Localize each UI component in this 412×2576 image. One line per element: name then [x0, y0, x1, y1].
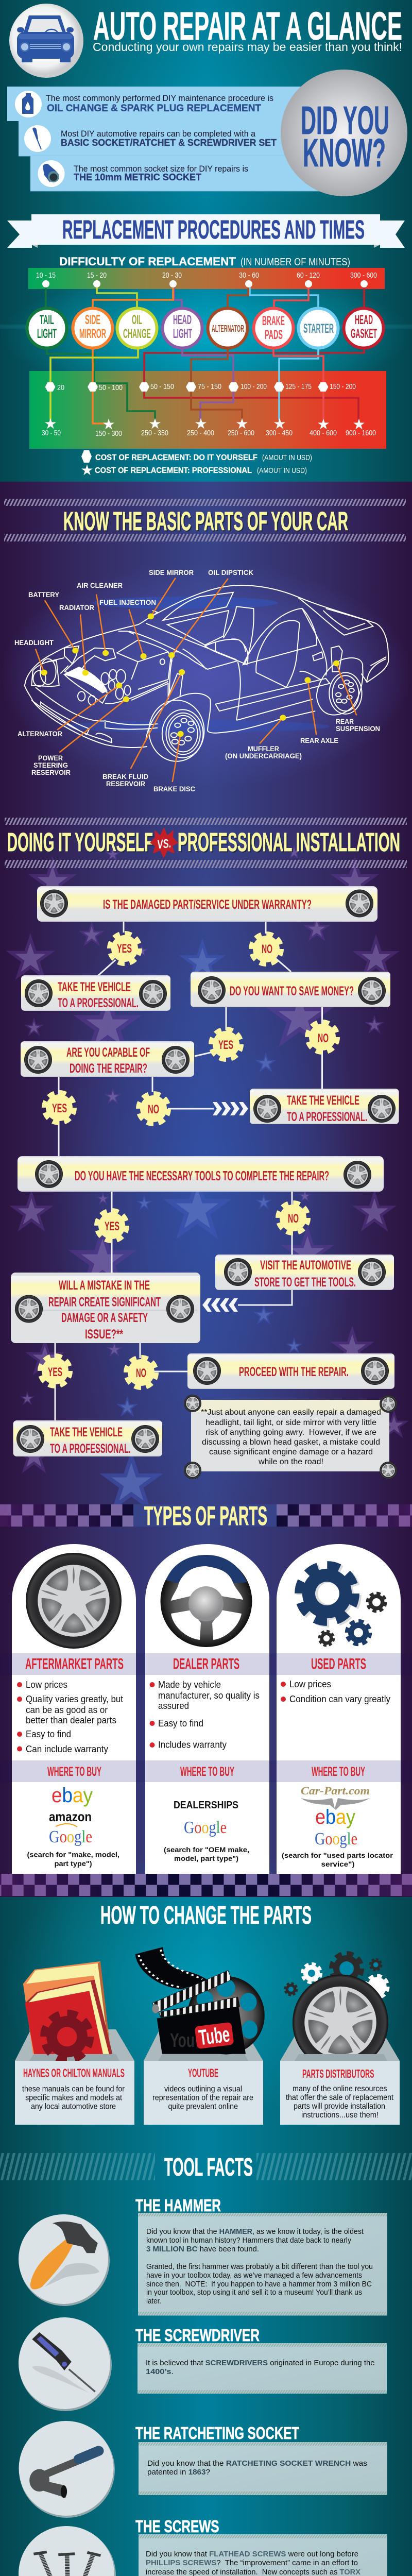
legend: COST OF REPLACEMENT: PROFESSIONAL: [95, 466, 252, 475]
part labels: SUSPENSION: [336, 725, 380, 733]
fact panel 2: socket and screwdriver set: Most DIY automotive repairs can be completed with a: [61, 129, 256, 139]
column: used parts: USED PARTS: [311, 1656, 366, 1672]
minutes scale bar: 20 - 30: [162, 271, 182, 280]
result: take the vehicle to a professional: TAKE THE VEHICLE: [58, 980, 131, 994]
search hint: part type"): [55, 1859, 92, 1868]
answer gear: yes: [110, 934, 140, 963]
search hint: (search for "used parts locator: [282, 1851, 393, 1859]
fact panel: [139, 2534, 387, 2576]
logo: car-part.com: [301, 1784, 370, 1810]
part: brake pads: [253, 308, 294, 348]
search hint: [164, 1845, 249, 1862]
professional costs: 900 - 1600: [346, 429, 376, 437]
answer gear: yes: YES: [117, 942, 132, 956]
question: save money: [191, 972, 390, 1007]
professional costs: 400 - 600: [310, 429, 337, 437]
did you know panels: [7, 87, 324, 191]
subtitle: Conducting your own repairs may be easier than you think!: [93, 40, 402, 54]
gap shading for bands: [0, 1653, 412, 1782]
answer gear: yes: [40, 1356, 70, 1386]
benefits list: Easy to find: [158, 1718, 203, 1728]
resource box: youtube: YOUTUBE: [188, 2066, 218, 2079]
resource box: parts distributors: parts will provide installation: [294, 2102, 385, 2111]
search hint: service"): [321, 1860, 354, 1868]
fact panel 3: 10mm socket: The most common socket size for DIY repairs is: [74, 164, 248, 174]
benefits list: manufacturer, so quality is: [158, 1690, 260, 1701]
answer gear: no: [139, 1094, 168, 1124]
part: oil change: CHANGE: [123, 327, 151, 341]
tool: hammer: THE HAMMER: [135, 2196, 221, 2215]
fact panel: have in your toolbox today, as we’ve managed a few advancements: [146, 2272, 362, 2280]
professional costs: 30 - 50: [42, 429, 61, 437]
heading: tool facts: TOOL FACTS: [164, 2154, 253, 2181]
benefits list: Low prices: [289, 1679, 331, 1689]
part labels: RADIATOR: [59, 604, 94, 612]
part labels: (ON UNDERCARRIAGE): [225, 752, 302, 760]
do it yourself costs: 75 - 150: [198, 382, 221, 391]
footnote card: [184, 1395, 397, 1479]
question: mistake consequences: DAMAGE OR A SAFETY: [61, 1311, 148, 1325]
fact panel: Did you know that the HAMMER, as we know it today, is the oldest: [146, 2228, 364, 2236]
icon: hammer: [19, 2214, 110, 2306]
result: take the vehicle to a professional: [21, 975, 170, 1011]
fact panel: [139, 2442, 387, 2495]
legend: (AMOUT IN USD): [257, 466, 307, 475]
part: side mirror: MIRROR: [79, 327, 106, 341]
car diagram glow: [0, 562, 412, 788]
tool: hammer: [19, 2196, 387, 2315]
search hint: (search for "OEM make,: [164, 1845, 249, 1854]
benefits list: [149, 1680, 260, 1750]
part: head gasket: HEAD: [355, 313, 373, 327]
search hint: [282, 1851, 393, 1868]
part: starter: STARTER: [303, 321, 334, 336]
part labels: ALTERNATOR: [18, 730, 62, 738]
checkered divider: [0, 1874, 412, 1897]
part: brake pads: BRAKE: [262, 314, 285, 328]
resource box: youtube: videos outlining a visual: [164, 2085, 242, 2094]
benefits list: Made by vehicle: [158, 1680, 221, 1690]
heading: doing it yourself vs professional installation: DOING IT YOURSELF: [7, 827, 153, 857]
fact panel 1: oil change: [7, 87, 316, 121]
part: head gasket: GASKET: [351, 327, 377, 341]
part labels: HEADLIGHT: [14, 639, 54, 647]
fact panel: [138, 2213, 387, 2315]
part labels: OIL DIPSTICK: [208, 569, 253, 577]
answer gear: no: [278, 1203, 308, 1233]
fact panel: Granted, the first hammer was probably a bit different than the tool you: [146, 2263, 373, 2271]
question: mistake consequences: REPAIR CREATE SIGNIFICANT: [48, 1295, 161, 1310]
icon: gears: [299, 1566, 385, 1646]
part labels: STEERING: [33, 761, 68, 769]
part: alternator: ALTERNATOR: [212, 324, 244, 334]
answer gear: yes: [97, 1211, 127, 1241]
search hint: model, part type"): [174, 1854, 238, 1862]
legend: (AMOUT IN USD): [262, 453, 312, 462]
part: oil change: [117, 308, 157, 348]
answer gear: no: NO: [136, 1366, 146, 1380]
result: visit the automotive store: VISIT THE AUTOMOTIVE: [260, 1258, 351, 1273]
fact panel 2: socket and screwdriver set: [19, 121, 317, 156]
do it yourself costs: 100 - 200: [241, 382, 267, 391]
professional costs: 250 - 350: [141, 429, 168, 437]
background: teal header section: [0, 0, 412, 482]
part labels: BREAK FLUID: [102, 773, 148, 781]
heading: tool facts: [0, 2153, 412, 2181]
fact panel 1: oil change: The most commonly performed DIY maintenance procedure is: [46, 94, 273, 103]
icon: film reel and clapperboard: [135, 1947, 265, 2055]
icon: film reel and clapperboard: You: [170, 2030, 195, 2052]
fact panel: 1400’s .: [146, 2368, 174, 2376]
column: aftermarket parts: [12, 1544, 136, 1874]
benefits list: Easy to find: [26, 1729, 71, 1739]
question: capable of repair: [21, 1041, 194, 1077]
answer gear: yes: [44, 1093, 74, 1123]
part labels: REAR AXLE: [300, 737, 338, 744]
footnote card: while on the road!: [258, 1458, 323, 1466]
minutes scale bar: [28, 268, 385, 289]
professional costs: 300 - 450: [266, 429, 293, 437]
resource box: manuals: HAYNES OR CHILTON MANUALS: [23, 2066, 125, 2079]
resource box: manuals: specific makes and models at: [25, 2094, 122, 2103]
column: dealer parts: [145, 1544, 269, 1874]
tool: screws: [19, 2517, 387, 2576]
icon: tire: [26, 1553, 122, 1649]
column: dealer parts: WHERE TO BUY: [180, 1765, 234, 1779]
benefits list: Low prices: [26, 1680, 67, 1690]
flowchart: [11, 886, 399, 1479]
resource box: manuals: [15, 1961, 134, 2125]
answer gear: yes: YES: [218, 1038, 233, 1052]
answer gear: no: NO: [262, 942, 272, 956]
resource box: parts distributors: instructions...use them!: [301, 2111, 379, 2120]
benefits list: can be as good as or: [26, 1705, 108, 1715]
tool: screwdriver: THE SCREWDRIVER: [135, 2326, 260, 2345]
part labels: MUFFLER: [248, 745, 279, 753]
part: oil change: OIL: [132, 313, 142, 327]
answer gear: yes: YES: [48, 1365, 62, 1379]
footnote card: risk of anything going awry. However, if we are: [205, 1428, 376, 1437]
question: capable of repair: DOING THE REPAIR?: [70, 1061, 147, 1076]
part: head light: HEAD: [173, 313, 192, 327]
legend: [81, 450, 312, 475]
logo: car-part.com: Car-Part.com: [301, 1784, 370, 1797]
resource box: parts distributors: [280, 1954, 400, 2125]
fact panel: PHILLIPS SCREWS ? The “improvement” came in an effort to: [146, 2559, 358, 2567]
part labels: RESERVOIR: [106, 780, 145, 788]
icon: film reel and clapperboard: Tube: [197, 2022, 231, 2049]
icon: screws: [19, 2526, 116, 2576]
question: necessary tools: [18, 1156, 384, 1192]
part labels: AIR CLEANER: [77, 582, 123, 589]
fact panel: patented in 1863?: [147, 2468, 210, 2477]
icon: steering wheel: [161, 1555, 252, 1647]
do it yourself costs: 150 - 200: [330, 382, 356, 391]
search hint: [27, 1851, 119, 1868]
result: take the vehicle to a professional: [250, 1089, 399, 1124]
did you know circle: [281, 70, 407, 196]
part: side mirror: SIDE: [85, 313, 100, 327]
icon: ratchet: [19, 2421, 115, 2518]
logo: google: Google: [184, 1818, 227, 1837]
tool: ratcheting socket: [19, 2421, 387, 2518]
answer gear: no: [307, 1022, 337, 1052]
resource box: manuals: any local automotive store: [31, 2103, 116, 2111]
fact panel: It is believed that SCREWDRIVERS originated in Europe during the: [146, 2359, 375, 2367]
question: mistake consequences: ISSUE?**: [85, 1327, 123, 1342]
fact panel 1: oil change: OIL CHANGE & SPARK PLUG REPLACEMENT: [47, 103, 261, 114]
question: under warranty: [37, 886, 377, 922]
chart heading: [59, 255, 350, 268]
footnote card: **Just about anyone can easily repair a damaged: [201, 1408, 381, 1417]
fact panel: since then. NOTE: If you happen to have a hammer from 3 million BC: [146, 2280, 372, 2289]
fact panel: later.: [146, 2297, 161, 2306]
resource box: parts distributors: that offer the sale of replacement: [286, 2093, 393, 2102]
part pointers: [36, 578, 356, 782]
part: brake pads: PADS: [265, 328, 283, 342]
do it yourself costs: 125 - 175: [285, 382, 312, 391]
benefits list: Includes warranty: [158, 1739, 227, 1750]
resource box: youtube: quite prevalent online: [168, 2103, 238, 2111]
part labels: [14, 569, 380, 793]
tool: screwdriver: [19, 2317, 387, 2411]
professional costs: 150 - 300: [95, 429, 122, 438]
fact panel: 3 MILLION BC have been found.: [146, 2245, 259, 2253]
column: aftermarket parts: AFTERMARKET PARTS: [25, 1656, 124, 1672]
benefits list: [281, 1679, 390, 1704]
part labels: RESERVOIR: [31, 769, 71, 776]
fact panel: Did you know that the RATCHETING SOCKET WRENCH was: [147, 2460, 367, 2468]
resource box: youtube: [135, 1947, 265, 2125]
resource box: manuals: these manuals can be found for: [22, 2085, 125, 2094]
icon: repair manuals: [23, 1961, 112, 2060]
connector lines: [46, 284, 364, 423]
arrow: back to mistake question: [202, 1298, 238, 1312]
benefits list: Condition can vary greatly: [289, 1694, 390, 1704]
benefits list: Can include warranty: [26, 1744, 108, 1754]
column: dealer parts: DEALERSHIPS: [174, 1800, 238, 1811]
question: capable of repair: ARE YOU CAPABLE OF: [66, 1045, 150, 1060]
column: aftermarket parts: WHERE TO BUY: [47, 1765, 101, 1779]
professional costs: 250 - 600: [228, 429, 254, 437]
part labels: BATTERY: [28, 591, 59, 599]
result: take the vehicle to a professional: TAKE THE VEHICLE: [50, 1425, 123, 1439]
resource box: parts distributors: many of the online resources: [293, 2084, 387, 2093]
part: tail light: [27, 308, 67, 348]
result: proceed with the repair: [187, 1353, 394, 1389]
professional costs: [42, 418, 376, 438]
part: starter: [299, 308, 338, 348]
benefits list: assured: [158, 1701, 189, 1711]
minutes scale bar: 300 - 600: [350, 271, 377, 280]
column: used parts: WHERE TO BUY: [312, 1765, 365, 1779]
icon: tire and gears: [285, 1954, 388, 2070]
part labels: BRAKE DISC: [153, 785, 195, 793]
logo: ebay: ebay: [52, 1784, 93, 1807]
result: take the vehicle to a professional: TO A PROFESSIONAL.: [58, 996, 139, 1010]
logo: google: Google: [49, 1827, 92, 1846]
resource box: youtube: representation of the repair are: [152, 2094, 253, 2103]
part: tail light: TAIL: [40, 313, 54, 327]
part labels: REAR: [336, 718, 354, 725]
answer gear: no: NO: [288, 1212, 299, 1226]
footnote card: discussing a blown head gasket, a mistake could: [202, 1438, 380, 1447]
result: take the vehicle to a professional: TAKE THE VEHICLE: [287, 1093, 359, 1108]
search hint: (search for "make, model,: [27, 1851, 119, 1859]
minutes scale bar: 60 - 120: [297, 271, 320, 280]
answer gear: no: [251, 934, 281, 964]
do it yourself costs: 50 - 100: [99, 383, 123, 392]
professional costs: 250 - 400: [187, 429, 214, 437]
answer gear: yes: YES: [105, 1219, 119, 1233]
result: visit the automotive store: [215, 1255, 394, 1290]
minutes scale bar: 10 - 15: [36, 271, 56, 280]
heading: types of parts: [0, 1501, 412, 1531]
result: take the vehicle to a professional: TO A PROFESSIONAL.: [50, 1442, 131, 1456]
tool: ratcheting socket: THE RATCHETING SOCKET: [135, 2424, 299, 2443]
part labels: FUEL INJECTION: [99, 599, 156, 606]
footnote card: headlight, tail light, or side mirror with very little: [205, 1418, 376, 1427]
heading: types of parts: TYPES OF PARTS: [144, 1501, 267, 1531]
question: mistake consequences: [11, 1273, 200, 1343]
legend: COST OF REPLACEMENT: DO IT YOURSELF: [95, 453, 258, 462]
fact panel 3: 10mm socket: THE 10mm METRIC SOCKET: [74, 172, 201, 182]
minutes scale bar: 15 - 20: [87, 271, 107, 280]
part: head light: [163, 308, 202, 348]
fact panel: known tool in human history? Hammers that date back to nearly: [146, 2236, 352, 2245]
fact panel 3: 10mm socket: [30, 156, 324, 191]
part: side mirror: [73, 308, 112, 348]
chart heading: (IN NUMBER OF MINUTES): [241, 257, 350, 268]
fact panel 2: socket and screwdriver set: BASIC SOCKET/RATCHET & SCREWDRIVER SET: [61, 138, 277, 148]
benefits list: better than dealer parts: [26, 1715, 116, 1725]
heading: doing it yourself vs professional installation: VS.: [157, 837, 172, 852]
part: head light: LIGHT: [173, 327, 192, 341]
footnote card: cause significant engine damage or a hazard: [209, 1448, 373, 1456]
chart heading: DIFFICULTY OF REPLACEMENT: [59, 255, 236, 268]
answer gear: yes: [211, 1029, 241, 1059]
heading: know the basic parts of your car: [4, 499, 406, 541]
column: used parts: [277, 1544, 401, 1874]
minute markers: [42, 280, 368, 287]
fact panel: Did you know that FLATHEAD SCREWS were out long before: [146, 2550, 358, 2558]
answer gear: no: NO: [148, 1103, 159, 1116]
diagram: car wireframe: [24, 585, 388, 761]
logo: ebay: ebay: [315, 1806, 355, 1828]
part: tail light: LIGHT: [37, 327, 57, 341]
heading: doing it yourself vs professional installation: [5, 818, 407, 868]
answer gear: no: NO: [318, 1031, 329, 1045]
minutes scale bar: 30 - 60: [239, 271, 259, 280]
logo: google: Google: [315, 1829, 357, 1849]
do it yourself costs: 50 - 150: [150, 382, 174, 391]
part: head gasket: [344, 308, 383, 348]
benefits list: Quality varies greatly, but: [26, 1694, 123, 1704]
part: alternator: [208, 308, 247, 348]
background: purple middle section: [0, 482, 412, 1897]
chart: difficulty and cost of replacement: [27, 255, 386, 475]
column: dealer parts: DEALER PARTS: [173, 1656, 239, 1672]
answer gear: yes: YES: [52, 1101, 67, 1115]
question: mistake consequences: WILL A MISTAKE IN THE: [59, 1278, 150, 1293]
do it yourself costs: 20: [57, 383, 64, 392]
fact panel: [138, 2343, 387, 2394]
answer gear: no: [126, 1358, 156, 1387]
result: take the vehicle to a professional: [13, 1420, 162, 1456]
part labels: POWER: [38, 754, 63, 762]
header badge: car icon: [9, 4, 83, 78]
cost panel: [29, 371, 386, 449]
icon: screwdriver: [19, 2317, 112, 2411]
arrow: to take the vehicle: [213, 1102, 248, 1115]
fact panel: in your toolbox, stop using it and sell it to a museum! You’ll thank us: [146, 2289, 362, 2297]
benefits list: [17, 1680, 123, 1754]
tool: screws: THE SCREWS: [135, 2517, 219, 2536]
background: teal lower section: [0, 1850, 412, 2576]
part labels: SIDE MIRROR: [149, 569, 194, 577]
flow connectors: [55, 922, 322, 1420]
do it yourself costs: [45, 382, 356, 392]
logo: amazon: amazon: [49, 1809, 92, 1824]
